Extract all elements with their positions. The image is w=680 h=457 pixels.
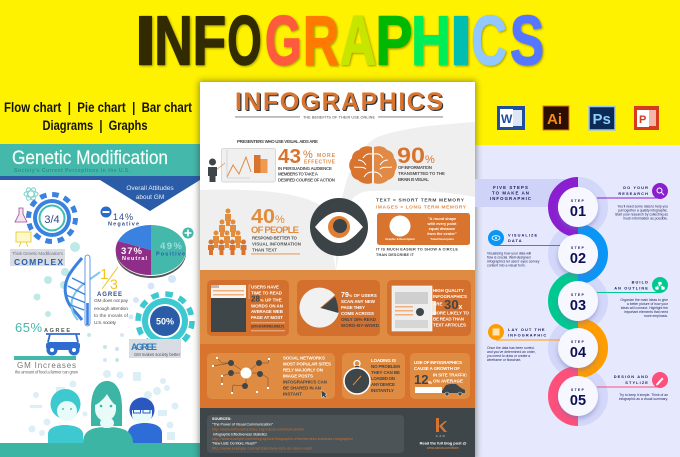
card: site traffic: 12 bbox=[414, 372, 428, 387]
main title: S bbox=[510, 2, 544, 80]
main title: I bbox=[134, 2, 156, 80]
step 04: 04 bbox=[570, 345, 586, 361]
step 02: infographics let users' eyes convey bbox=[487, 260, 540, 264]
memory comparison: with every point bbox=[427, 222, 457, 226]
stat: 40 percent of people: 40 bbox=[251, 206, 275, 228]
main title: F bbox=[192, 2, 226, 80]
software icons bbox=[497, 106, 659, 130]
step 01: You'll need some data to help you bbox=[617, 204, 668, 208]
card: 28 percent bbox=[207, 280, 289, 336]
memory comparison: Graphic & Description bbox=[385, 237, 415, 241]
icon: eye bbox=[310, 198, 368, 256]
card: 28 percent: (20% IS MORE LIKELY) bbox=[251, 324, 285, 328]
icon: brain bbox=[349, 146, 397, 184]
stat: 43 percent: EFFECTIVE bbox=[304, 160, 336, 166]
card: 79 percent: ONLY 16% READ bbox=[341, 317, 376, 322]
main title: A bbox=[340, 2, 376, 80]
pie chart attitudes: 37% bbox=[121, 246, 143, 257]
step 03: important elements that need bbox=[624, 310, 668, 314]
icon: cursor bbox=[321, 390, 327, 398]
pie chart attitudes: 14% bbox=[113, 212, 133, 222]
step 03: ideas will connect. Highlight the bbox=[621, 306, 668, 310]
card: site traffic bbox=[410, 353, 470, 399]
step 05: DESIGN AND bbox=[614, 374, 649, 379]
step 02 bbox=[487, 230, 598, 274]
card: site traffic: CAUSE A GROWTH OF bbox=[414, 366, 460, 371]
stat: 40 percent of people: THAN TEXT bbox=[252, 248, 277, 252]
card: social networks: MOST POPULAR SITES bbox=[283, 362, 331, 366]
small icons: atom, flask, board bbox=[15, 186, 38, 247]
card: 30x: INFOGRAPHICS bbox=[433, 294, 467, 299]
card: loading bbox=[342, 353, 405, 399]
shadow of centre poster bbox=[199, 81, 476, 457]
gear 3/4 complex: Think Genetic Modification's bbox=[12, 251, 64, 256]
gear 3/4 complex: 3/4 bbox=[44, 214, 60, 226]
step 01: put together a quality infographic. bbox=[618, 208, 668, 212]
doodle icons bbox=[28, 370, 178, 440]
card: social networks: IMAGE POSTS bbox=[283, 374, 313, 378]
chart types list: Diagrams | Graphs bbox=[42, 118, 148, 133]
logo: CAN bbox=[436, 434, 446, 438]
poster title: INFOGRAPHICS bbox=[236, 89, 444, 117]
main title: P bbox=[376, 2, 412, 80]
three people bbox=[48, 381, 162, 443]
card: 79 percent: WORD-BY-WORD bbox=[341, 323, 379, 328]
icon: photoshop: Ps bbox=[592, 111, 611, 128]
65 percent agree with tractor: GM Increases bbox=[17, 361, 76, 370]
step 01: DO YOUR bbox=[623, 185, 649, 190]
panel: centre poster bbox=[200, 82, 475, 457]
card: social networks: INSTANT bbox=[283, 392, 302, 396]
bottom teal bar bbox=[0, 443, 200, 457]
stat: 43 percent: PRESENTERS WHO USE VISUAL AIDS ARE bbox=[237, 139, 318, 144]
stat: 43 percent: DESIRED COURSE OF ACTION bbox=[278, 178, 335, 182]
memory comparison: "Ideal Description bbox=[430, 237, 454, 241]
card: 79 percent bbox=[297, 280, 380, 336]
icon: powerpoint bbox=[634, 106, 659, 130]
icon: people pyramid bbox=[208, 208, 246, 255]
card: loading: ANY DEVICE bbox=[371, 382, 395, 387]
one third agree: 3 bbox=[110, 276, 118, 292]
step 04: STEP bbox=[571, 340, 585, 344]
card: 30x bbox=[387, 280, 471, 336]
card: 28 percent: WORDS ON AN bbox=[251, 304, 283, 308]
main title: R bbox=[303, 2, 339, 80]
stat: 43 percent: % bbox=[303, 149, 313, 161]
memory comparison bbox=[376, 198, 470, 257]
step 04: Once the data has been sorted, bbox=[487, 346, 535, 350]
card: 79 percent: SCAN ANY NEW bbox=[341, 299, 376, 304]
chart types list bbox=[4, 100, 192, 133]
step 03: more emphasis. bbox=[644, 314, 668, 318]
heading band: TO MAKE AN bbox=[492, 190, 530, 196]
gear 50 percent: GM makes society better bbox=[134, 352, 181, 357]
person: right bbox=[128, 398, 162, 443]
main title: N bbox=[154, 2, 193, 80]
footer: sources: SOURCES: bbox=[212, 417, 231, 421]
footer: sources: Infographic Effectiveness Statistics bbox=[213, 432, 267, 436]
band: reading stats bbox=[200, 270, 475, 344]
step 02: DATA bbox=[508, 238, 523, 243]
panel: genetic modification bbox=[0, 144, 200, 457]
step 03: AN OUTLINE bbox=[614, 286, 649, 290]
step 01: 01 bbox=[570, 204, 586, 220]
one third agree bbox=[94, 266, 129, 326]
65 percent agree with tractor: AGREE bbox=[44, 328, 70, 334]
header band bbox=[0, 144, 200, 211]
stat: 43 percent bbox=[208, 139, 336, 182]
step 05: infographic as a visual summary. bbox=[619, 397, 668, 401]
heading band: INFOGRAPHIC bbox=[490, 196, 532, 201]
card: social networks: SOCIAL NETWORKS bbox=[283, 356, 325, 360]
step 05: STYLIZE bbox=[625, 380, 649, 385]
step 01: STEP bbox=[571, 199, 585, 203]
memory comparison: IMAGES = LONG TERM MEMORY bbox=[376, 204, 467, 210]
gear 50 percent: 50% bbox=[156, 316, 174, 326]
footer: sources: www.canva.com/learn bbox=[427, 446, 459, 450]
poster subtitle: THE BENEFITS OF THEIR USE ONLINE bbox=[303, 116, 375, 120]
card: site traffic: ON AVERAGE bbox=[433, 378, 463, 384]
card: social networks: BE SHARED IN AN bbox=[283, 386, 321, 390]
person: centre bbox=[83, 381, 133, 443]
footer: sources: http://www.billionsinstitute.org/visual-communication/ bbox=[212, 428, 304, 432]
card: site traffic: USE OF INFOGRAPHICS bbox=[414, 360, 462, 365]
one third agree: U.S. society bbox=[94, 320, 117, 326]
card: 30x: HIGH QUALITY bbox=[433, 288, 464, 293]
header band: Overall Attitudes bbox=[126, 185, 174, 192]
pie chart attitudes: Neutral bbox=[122, 256, 147, 262]
card: social networks bbox=[207, 353, 335, 399]
card: loading: THEY CAN BE bbox=[371, 370, 400, 375]
step 02: flow is crucial. Well-designed bbox=[487, 256, 531, 260]
step rings bbox=[553, 182, 603, 421]
footer: sources: http://www.example.com/articles/new-lists-do-more-read/ bbox=[212, 446, 312, 450]
stat: 90 percent: 90 bbox=[397, 143, 425, 168]
card: 28 percent: TIME TO READ bbox=[251, 290, 282, 296]
card: 30x: 30 bbox=[444, 297, 459, 312]
stat: 40 percent of people: VISUAL INFORMATION bbox=[252, 242, 301, 246]
65 percent agree with tractor: 65% bbox=[15, 320, 42, 335]
step 01: Start your research by collecting as bbox=[615, 212, 668, 216]
bubbles bbox=[34, 242, 176, 362]
heading band: FIVE STEPS bbox=[493, 185, 529, 190]
step 04: wireframe or flowchart. bbox=[487, 358, 521, 362]
card: 30x: BE READ THAN bbox=[433, 316, 464, 322]
main title: H bbox=[411, 2, 451, 80]
memory comparison: IT IS MUCH EASIER TO SHOW A CIRCLE bbox=[376, 248, 458, 252]
memory comparison: from the center" bbox=[427, 232, 457, 236]
step 01 bbox=[558, 183, 668, 227]
gear 50 percent: AGREE bbox=[131, 342, 157, 352]
card: loading: INSTANTLY bbox=[371, 388, 394, 393]
stat: 90 percent: TRANSMITTED TO THE bbox=[398, 171, 445, 176]
card: 30x: TEXT ARTICLES bbox=[433, 322, 466, 328]
stat: 40 percent of people: % bbox=[275, 214, 285, 226]
gear 3/4 complex bbox=[10, 194, 76, 267]
step 04: INFOGRAPHIC bbox=[508, 332, 547, 338]
step 04 bbox=[487, 324, 598, 368]
card: social networks: INFOGRAPHICS CAN bbox=[283, 380, 327, 384]
card: loading: LOADED ON bbox=[371, 376, 395, 381]
dna and test tube bbox=[65, 255, 100, 326]
card: social networks: RELY MAJORLY ON bbox=[283, 368, 323, 372]
stat: 90 percent: % bbox=[425, 154, 435, 166]
pie chart attitudes: Negative bbox=[108, 222, 139, 228]
footer: sources: "The Power of Visual Communication" bbox=[212, 422, 274, 426]
card: 30x: MORE LIKELY TO bbox=[433, 310, 469, 316]
step 05: 05 bbox=[570, 393, 586, 409]
main title: C bbox=[471, 2, 507, 80]
main title bbox=[134, 2, 544, 80]
icon: car bbox=[442, 384, 465, 396]
pie chart attitudes: Positive bbox=[156, 252, 185, 258]
band: sharing stats bbox=[200, 344, 475, 408]
stat: 40 percent of people bbox=[208, 206, 301, 255]
stat: 43 percent: MORE bbox=[317, 153, 336, 159]
card: 28 percent: AVERAGE WEB bbox=[251, 309, 283, 314]
card: 28 percent: PAGE AT MOST bbox=[251, 315, 283, 320]
stat: 90 percent: BRAIN IS VISUAL bbox=[398, 177, 429, 182]
step 01: RESEARCH bbox=[618, 191, 649, 196]
pie chart attitudes bbox=[100, 206, 194, 278]
stat: 90 percent: OF INFORMATION bbox=[398, 165, 432, 170]
panel: five steps bbox=[475, 179, 669, 421]
panel: steps background bbox=[475, 145, 680, 457]
main title: O bbox=[227, 2, 262, 80]
65 percent agree with tractor: the amount of food a farmer can grow bbox=[15, 370, 79, 374]
one third agree: to the morals of bbox=[94, 313, 129, 319]
step 04: LAY OUT THE bbox=[508, 327, 546, 332]
gear 3/4 complex: COMPLEX bbox=[14, 257, 63, 267]
plus icon bbox=[182, 228, 194, 238]
card: 79 percent: 79% OF USERS bbox=[341, 292, 377, 299]
gear 50 percent bbox=[129, 294, 192, 358]
person: left bbox=[48, 389, 83, 443]
step 03: BUILD bbox=[632, 280, 649, 284]
icon: illustrator: Ai bbox=[547, 111, 562, 128]
step 04: and you've determined an order, bbox=[487, 350, 536, 354]
main title: I bbox=[449, 2, 473, 80]
footer: sources bbox=[200, 408, 475, 457]
chart types list: Flow chart | Pie chart | Bar chart bbox=[4, 100, 192, 115]
stat: 40 percent of people: RESPOND BETTER TO bbox=[252, 236, 297, 240]
stat: 90 percent bbox=[349, 143, 445, 184]
one third agree: 1 bbox=[100, 266, 108, 283]
memory comparison: TEXT = SHORT TERM MEMORY bbox=[376, 198, 465, 204]
card: 30x: x bbox=[458, 304, 462, 311]
step 05: STEP bbox=[571, 388, 585, 392]
card: 28 percent: USERS HAVE bbox=[251, 284, 279, 290]
header band: Genetic Modification bbox=[12, 147, 168, 169]
step 03: a better picture of how your bbox=[627, 302, 669, 306]
step 05 bbox=[558, 372, 668, 416]
card: site traffic: % bbox=[428, 380, 432, 385]
card: loading: NO PROBLEM bbox=[371, 364, 400, 369]
icon: word bbox=[497, 106, 525, 130]
step 03: 03 bbox=[570, 298, 586, 314]
icon: illustrator bbox=[543, 106, 569, 130]
header band: Society's Current Perceptions in the U.S. bbox=[14, 168, 131, 174]
card: 28 percent: 28% UP THE bbox=[251, 294, 282, 304]
pie chart attitudes: 49% bbox=[160, 241, 183, 252]
step 02: STEP bbox=[571, 246, 585, 250]
poster title: INFOGRAPHICS bbox=[235, 88, 443, 116]
footer: sources: Read the full blog post @ bbox=[420, 440, 467, 446]
stat: 40 percent of people: OF PEOPLE bbox=[251, 225, 299, 236]
heading band bbox=[475, 179, 578, 207]
memory comparison: equal distance bbox=[429, 227, 455, 231]
header band: about GM bbox=[136, 194, 164, 201]
card: site traffic: IN SITE TRAFFIC bbox=[433, 372, 468, 378]
stat: 43 percent: MEMBERS TO TAKE A bbox=[278, 172, 319, 176]
one third agree: GM does not pay bbox=[94, 298, 129, 304]
step 04: you need to draw or create a bbox=[487, 354, 530, 358]
card: 30x: ARE bbox=[433, 302, 443, 306]
step 03: STEP bbox=[571, 293, 585, 297]
step 03 bbox=[558, 277, 669, 321]
card: 79 percent: PAGE THEY bbox=[341, 305, 365, 310]
step 02: VISUALIZE bbox=[508, 232, 538, 238]
step 02: Visualizing how your data will bbox=[487, 252, 531, 256]
logo bbox=[436, 418, 447, 438]
minus icon bbox=[100, 206, 112, 218]
footer: sources: "New Lists: Do More, Read?" bbox=[212, 442, 258, 446]
footer: sources: http://www.example.com/infographics/infographic-effectiveness-statistics-infographic/ bbox=[212, 437, 353, 441]
one third agree: enough attention bbox=[94, 306, 128, 312]
icon: powerpoint: P bbox=[639, 114, 646, 126]
one third agree: AGREE bbox=[97, 292, 122, 298]
icon: photoshop bbox=[589, 106, 615, 130]
card: 79 percent: COME ACROSS bbox=[341, 311, 374, 316]
card: loading: LOADING IS bbox=[371, 358, 396, 363]
step 02: 02 bbox=[570, 251, 586, 267]
main title: G bbox=[265, 2, 302, 80]
step 02: content into a visual form. bbox=[487, 264, 526, 268]
step 05: Try to keep it simple. Think of an bbox=[619, 393, 668, 397]
step 01: much information as possible. bbox=[623, 216, 668, 220]
stat: 43 percent: IN PERSUADING AUDIENCE bbox=[278, 166, 332, 171]
icon: word: W bbox=[501, 112, 513, 126]
step 03: Organize the main ideas to give bbox=[620, 298, 668, 302]
memory comparison: THAN DESCRIBE IT bbox=[376, 253, 415, 257]
stat: 43 percent: 43 bbox=[278, 146, 301, 168]
65 percent agree with tractor bbox=[14, 320, 80, 374]
memory comparison: "A round shape bbox=[428, 217, 456, 221]
grey blobs bbox=[200, 122, 475, 270]
